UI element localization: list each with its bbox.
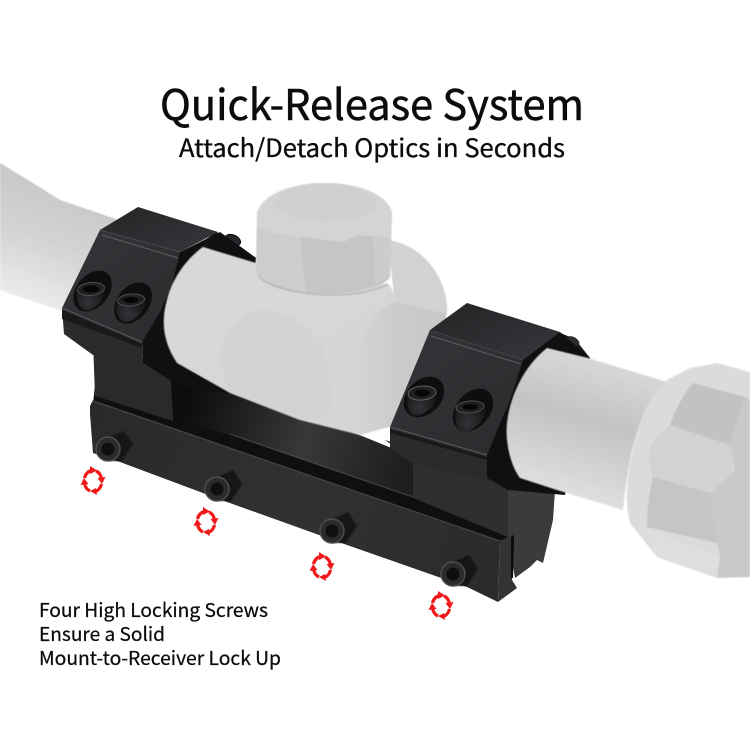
eyepiece: [627, 363, 750, 578]
rail slot: [511, 535, 514, 578]
ring top face: [100, 207, 218, 252]
black ring arc: [483, 332, 590, 495]
caption: Four High Locking Screws: [39, 596, 268, 623]
center scope: [164, 183, 447, 435]
rail end cap: [498, 533, 517, 602]
connecting bar: [170, 360, 413, 498]
turret cap: [256, 183, 392, 295]
black channel: [93, 385, 510, 548]
upper ridge: [431, 336, 521, 364]
rail top highlight: [93, 401, 500, 541]
clamp screw 2: [445, 381, 501, 439]
black ring arc: [142, 232, 256, 395]
ring top face: [430, 303, 560, 360]
caption: Ensure a Solid: [39, 620, 165, 647]
left scope tube: [0, 163, 125, 330]
red rotation arrows 4: [428, 591, 454, 620]
rear band: [540, 332, 590, 358]
eyepiece lower band: [647, 477, 717, 543]
left ring: [62, 207, 256, 395]
clamp highlight: [390, 427, 487, 455]
red rotation arrows 2: [194, 507, 218, 536]
front tube: [350, 302, 446, 435]
subtitle: Attach/Detach Optics in Seconds: [179, 129, 565, 165]
cap left facet: [256, 227, 306, 292]
receiver side face: [508, 488, 555, 578]
right scope tube: [507, 348, 667, 510]
eyepiece bottom facet: [643, 527, 720, 578]
right ring: [390, 303, 590, 495]
cap collar: [258, 276, 388, 295]
rear screw right: [565, 334, 581, 348]
rear band left ring: [195, 232, 256, 262]
caption: [39, 596, 281, 671]
lower clamp: [390, 427, 487, 480]
locking screw 1: [96, 431, 133, 461]
eyepiece right shade: [710, 397, 750, 578]
cap right facet: [373, 237, 391, 285]
clamp screw 2: [106, 275, 160, 331]
upper ridge: [102, 235, 178, 258]
ring front face: [390, 330, 523, 455]
locking screw 3: [320, 512, 357, 543]
clamp screw 1: [65, 263, 120, 319]
mount base: [90, 340, 555, 602]
tube to body seam: [164, 247, 256, 360]
top edge: [100, 230, 180, 252]
clamp highlight: [62, 308, 142, 342]
clamp screw 1: [396, 369, 452, 425]
cap chamfer: [257, 183, 392, 242]
bar line: [230, 434, 413, 497]
eyepiece upper band: [670, 383, 745, 445]
eyepiece flange: [627, 363, 750, 578]
locking screw 4: [441, 555, 478, 586]
center silhouette: [164, 247, 446, 435]
red rotation arrows 3: [310, 552, 334, 581]
clamp gap: [390, 429, 487, 460]
cap top face: [273, 183, 378, 222]
red rotation arrows 1: [80, 466, 106, 495]
right riser block: [385, 440, 508, 537]
caption: Mount-to-Receiver Lock Up: [39, 644, 281, 671]
front lobe: [222, 310, 334, 420]
scope rear bulge: [388, 240, 447, 315]
clamp gap: [62, 310, 142, 348]
ring front face: [62, 230, 180, 342]
lower clamp: [62, 308, 143, 365]
title: Quick-Release System: [160, 72, 584, 133]
rail front face: [90, 400, 500, 602]
eyepiece scallop: [649, 425, 733, 493]
locking screw 2: [205, 470, 242, 501]
rear screw left: [224, 232, 242, 248]
left riser block: [93, 340, 173, 421]
